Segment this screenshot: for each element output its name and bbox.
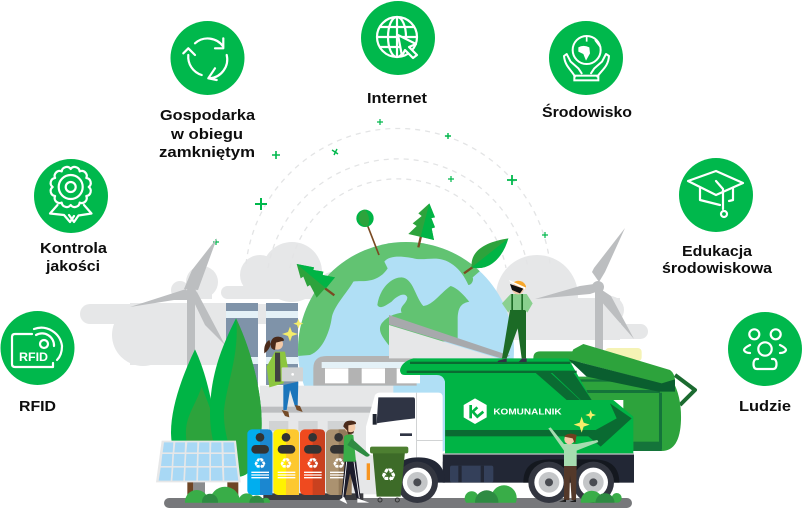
trees left xyxy=(171,318,262,497)
red bin: ♻ xyxy=(306,455,319,472)
body stripes xyxy=(407,362,632,447)
label: Środowisko xyxy=(542,103,632,121)
wheel arches xyxy=(392,457,445,483)
dashed arcs xyxy=(246,128,550,268)
label: RFID xyxy=(19,398,56,415)
icon: group of people xyxy=(728,312,802,386)
cab xyxy=(366,393,443,463)
yellow bin: ♻ xyxy=(279,455,293,472)
sparkle xyxy=(282,327,298,342)
recycling station, ramp and wall xyxy=(250,356,420,494)
truck brand name: KOMUNALNIK xyxy=(493,406,563,416)
solar panel xyxy=(156,441,241,501)
woman with laptop xyxy=(264,319,303,417)
icon: graduation cap xyxy=(679,158,753,232)
icon: rosette xyxy=(34,159,108,233)
sparkle plus marks xyxy=(213,119,548,245)
globe land xyxy=(298,242,480,356)
item: RFID xyxy=(0,311,74,415)
logo xyxy=(464,398,487,424)
item: Internet xyxy=(361,1,435,107)
label xyxy=(662,243,773,277)
item: Edukacja środowiskowa xyxy=(662,158,773,277)
icon: globe and cursor xyxy=(361,1,435,75)
item: Gospodarka w obiegu zamkniętym xyxy=(159,21,256,161)
icon: hands holding earth xyxy=(549,21,623,95)
man pushing bin xyxy=(339,421,374,504)
green wheelie bin xyxy=(370,447,408,502)
ball tree on globe xyxy=(356,210,379,255)
label: Internet xyxy=(367,90,427,107)
label: zamkniętym xyxy=(159,144,255,161)
item: Środowisko xyxy=(542,21,632,121)
label: Edukacja xyxy=(682,243,753,260)
item: Kontrola jakości xyxy=(34,159,108,275)
right tree xyxy=(210,318,262,497)
rear hopper xyxy=(533,344,695,451)
right wind turbine xyxy=(535,228,634,353)
bushes xyxy=(185,485,622,503)
green wheelie bin: ♻ xyxy=(381,465,397,486)
item: Ludzie xyxy=(728,312,802,415)
label xyxy=(159,107,256,161)
left pine tree on globe xyxy=(297,264,335,298)
pale yellow container xyxy=(605,348,642,361)
station arch xyxy=(313,356,420,386)
chassis xyxy=(443,454,634,483)
leaf on globe xyxy=(464,238,508,273)
label: jakości xyxy=(45,258,100,275)
icon: recycle arrows xyxy=(170,21,244,95)
worker on truck xyxy=(497,280,533,362)
left tree xyxy=(171,349,215,497)
garbage truck xyxy=(366,344,695,503)
brown bin: ♻ xyxy=(332,455,345,472)
label: Gospodarka xyxy=(160,107,256,124)
background clouds and strips xyxy=(80,242,648,366)
green body xyxy=(400,358,633,454)
left wind turbine xyxy=(130,238,225,376)
label xyxy=(40,240,108,275)
recycling bins xyxy=(247,421,374,504)
ramp xyxy=(389,315,510,359)
label: w obiegu xyxy=(170,126,243,143)
label: Kontrola xyxy=(40,240,108,257)
globe xyxy=(290,203,514,458)
wheels xyxy=(397,462,614,503)
office buildings xyxy=(226,303,298,385)
blue bin: ♻ xyxy=(253,455,267,472)
man waving by truck xyxy=(548,410,598,502)
label: środowiskowa xyxy=(662,260,773,277)
wall xyxy=(260,386,393,407)
yellow sparkles xyxy=(574,417,590,433)
ground xyxy=(164,498,632,508)
icon: RFID card: RFID xyxy=(19,350,48,364)
label: Ludzie xyxy=(739,398,791,415)
pine tree on globe xyxy=(408,203,435,247)
